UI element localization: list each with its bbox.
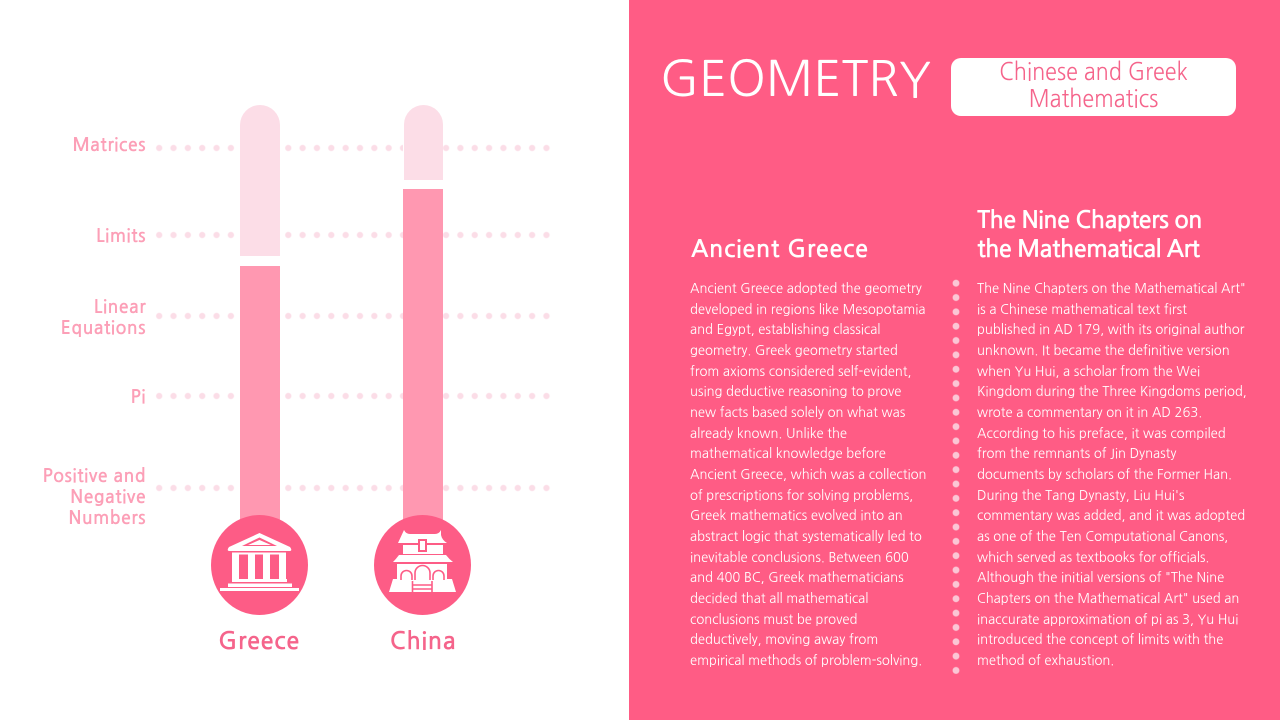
label: Positive and Negative Numbers (42, 467, 146, 527)
panel: chart background (0, 0, 629, 720)
text block: The Nine Chapters: The Nine Chapters on the Mathematical Art" (977, 282, 1246, 295)
heading: The Nine Chapters: The Nine Chapters on (977, 208, 1202, 232)
text block: The Nine Chapters: wrote a commentary on it in AD 263. (977, 406, 1202, 419)
text block: Ancient Greece: new facts based solely on what was (690, 406, 905, 419)
text block: The Nine Chapters: method of exhaustion. (977, 654, 1114, 667)
text block: The Nine Chapters: unknown. It became the definitive version (977, 344, 1230, 357)
label: Positive and Negative Numbers: Numbers (68, 509, 146, 527)
row guide: Linear Equations (152, 311, 552, 321)
title: GEOMETRY (660, 55, 931, 104)
heading: The Nine Chapters (977, 208, 1202, 260)
text block: Ancient Greece: Greek mathematics evolved into an (690, 509, 903, 522)
label: Positive and Negative Numbers: Positive and (42, 467, 146, 485)
text block: Ancient Greece: decided that all mathematical (690, 592, 868, 605)
bar remainder: Greece (240, 105, 280, 256)
text block: The Nine Chapters: introduced the concept of limits with the (977, 633, 1223, 646)
bar value: China (403, 189, 443, 525)
icon: Greek temple (211, 515, 308, 615)
text block: The Nine Chapters: from the remnants of Jin Dynasty (977, 447, 1176, 460)
text block: The Nine Chapters: which served as textbooks for officials. (977, 551, 1209, 564)
bar remainder: China (404, 105, 443, 180)
text block: Ancient Greece: conclusions must be proved (690, 613, 857, 626)
text block: Ancient Greece: already known. Unlike the (690, 427, 847, 440)
panel: text (629, 0, 1280, 720)
text block: The Nine Chapters: when Yu Hui, a scholar from the Wei (977, 365, 1200, 378)
text block: The Nine Chapters: published in AD 179, with its original author (977, 323, 1244, 336)
label: Limits: Limits (96, 227, 146, 245)
text block: Ancient Greece: Ancient Greece, which was a collection (690, 468, 926, 481)
text block: Ancient Greece: Ancient Greece adopted the geometry (690, 282, 922, 295)
text block: The Nine Chapters: documents by scholars of the Former Han. (977, 468, 1232, 481)
label: Pi: Pi (131, 388, 146, 406)
text block: Ancient Greece: mathematical knowledge before (690, 447, 886, 460)
text block: Ancient Greece: developed in regions like Mesopotamia (690, 303, 926, 316)
text block: Ancient Greece: and Egypt, establishing classical (690, 323, 880, 336)
label: Linear Equations: Linear (94, 298, 146, 316)
label: Positive and Negative Numbers: Negative (70, 488, 146, 506)
text block: Ancient Greece: abstract logic that systematically led to (690, 530, 922, 543)
label: Matrices: Matrices (72, 136, 146, 154)
heading: Ancient Greece: Ancient Greece (691, 237, 868, 261)
subtitle badge (951, 58, 1236, 116)
subtitle badge: Mathematics (1029, 87, 1158, 111)
bar value: Greece (240, 266, 280, 525)
text block: Ancient Greece (690, 282, 926, 667)
row guide: Positive and Negative Numbers (152, 483, 552, 493)
row guide: Limits (152, 230, 552, 240)
label: Linear Equations (61, 298, 146, 337)
row guide: Matrices (152, 143, 552, 153)
text block: Ancient Greece: using deductive reasoning to prove (690, 385, 901, 398)
text block: The Nine Chapters: commentary was added, and it was adopted (977, 509, 1245, 522)
label: Linear Equations: Equations (61, 319, 146, 337)
bar: Greece (240, 105, 280, 525)
row guide: Pi (152, 391, 552, 401)
text block: The Nine Chapters: According to his preface, it was compiled (977, 427, 1226, 440)
text block: Ancient Greece: and 400 BC, Greek mathematicians (690, 571, 904, 584)
text block: The Nine Chapters: During the Tang Dynasty, Liu Hui's (977, 489, 1184, 502)
label: China: China (390, 629, 456, 653)
text block: Ancient Greece: deductively, moving away from (690, 633, 878, 646)
text block: Ancient Greece: inevitable conclusions. Between 600 (690, 551, 909, 564)
text block: Ancient Greece: empirical methods of problem-solving. (690, 654, 922, 667)
text block: The Nine Chapters (977, 282, 1247, 667)
bar: China (403, 105, 443, 525)
text block: The Nine Chapters: is a Chinese mathematical text first (977, 303, 1187, 316)
text block: The Nine Chapters: Although the initial versions of "The Nine (977, 571, 1224, 584)
text block: The Nine Chapters: Chapters on the Mathematical Art" used an (977, 592, 1239, 605)
text block: Ancient Greece: from axioms considered self-evident, (690, 365, 911, 378)
column divider dots (951, 276, 961, 674)
label: Greece: Greece (218, 629, 300, 653)
text block: Ancient Greece: of prescriptions for solving problems, (690, 489, 913, 502)
text block: The Nine Chapters: inaccurate approximation of pi as 3, Yu Hui (977, 613, 1238, 626)
text block: The Nine Chapters: Kingdom during the Three Kingdoms period, (977, 385, 1247, 398)
icon: Chinese palace (374, 515, 471, 615)
text block: The Nine Chapters: as one of the Ten Computational Canons, (977, 530, 1228, 543)
text block: Ancient Greece: geometry. Greek geometry started (690, 344, 898, 357)
heading: The Nine Chapters: the Mathematical Art (977, 236, 1199, 260)
subtitle badge: Chinese and Greek (999, 60, 1188, 84)
